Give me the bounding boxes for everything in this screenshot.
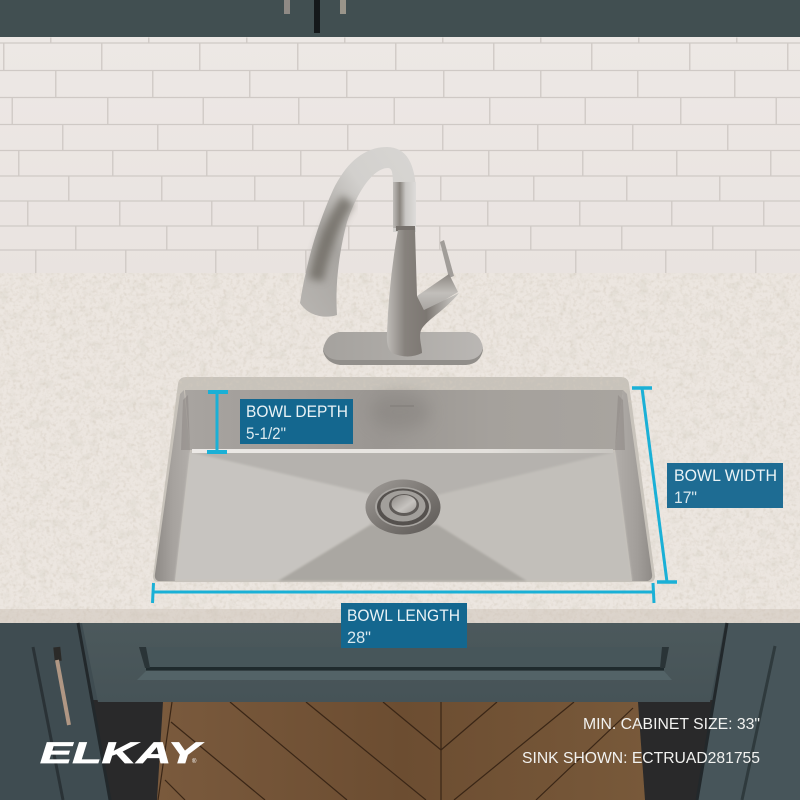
- faucet body: [387, 230, 459, 356]
- right door: [697, 623, 800, 800]
- spout: [300, 147, 416, 317]
- label: bowl length: [341, 603, 467, 648]
- basin floor: [175, 452, 632, 581]
- granite countertop: [0, 273, 800, 623]
- left wall: [155, 390, 190, 581]
- upper cabinets: [0, 0, 800, 38]
- drawer panel: [82, 623, 725, 702]
- dimension: bowl length: [152, 583, 654, 648]
- label: bowl width: [667, 463, 783, 508]
- toe kick: [90, 700, 720, 800]
- dimension: bowl width: [632, 388, 783, 582]
- label: bowl width: BOWL WIDTH: [674, 466, 777, 485]
- faucet handle: [417, 240, 458, 312]
- dimension: bowl depth: [207, 391, 353, 452]
- subway tile backsplash: [0, 37, 800, 277]
- rim: [153, 377, 655, 582]
- logo: Elkay: ELKAY: [40, 737, 205, 770]
- right wall: [615, 390, 652, 581]
- lower cabinets: [0, 623, 800, 800]
- logo: Elkay: [40, 737, 205, 770]
- back edge highlight: [192, 449, 613, 453]
- note: sink shown: SINK SHOWN: ECTRUAD281755: [522, 750, 760, 767]
- logo mark on back wall: [390, 405, 414, 407]
- wood floor: [157, 702, 645, 800]
- drain: [366, 480, 440, 534]
- label: bowl width: 17": [674, 488, 697, 507]
- label: bowl length: 28": [347, 628, 371, 647]
- label: bowl length: BOWL LENGTH: [347, 606, 460, 625]
- label: bowl depth: 5-1/2": [246, 424, 286, 443]
- label: bowl depth: [240, 399, 353, 444]
- faucet: [300, 147, 483, 365]
- deck plate: [323, 332, 483, 365]
- note: min cabinet size: MIN. CABINET SIZE: 33": [583, 716, 760, 733]
- logo: Elkay: ®: [192, 758, 197, 765]
- sink basin: [153, 377, 655, 582]
- label: bowl depth: BOWL DEPTH: [246, 402, 348, 421]
- left door: [0, 623, 110, 800]
- cabinet handle: [53, 647, 69, 725]
- back wall: [185, 390, 623, 450]
